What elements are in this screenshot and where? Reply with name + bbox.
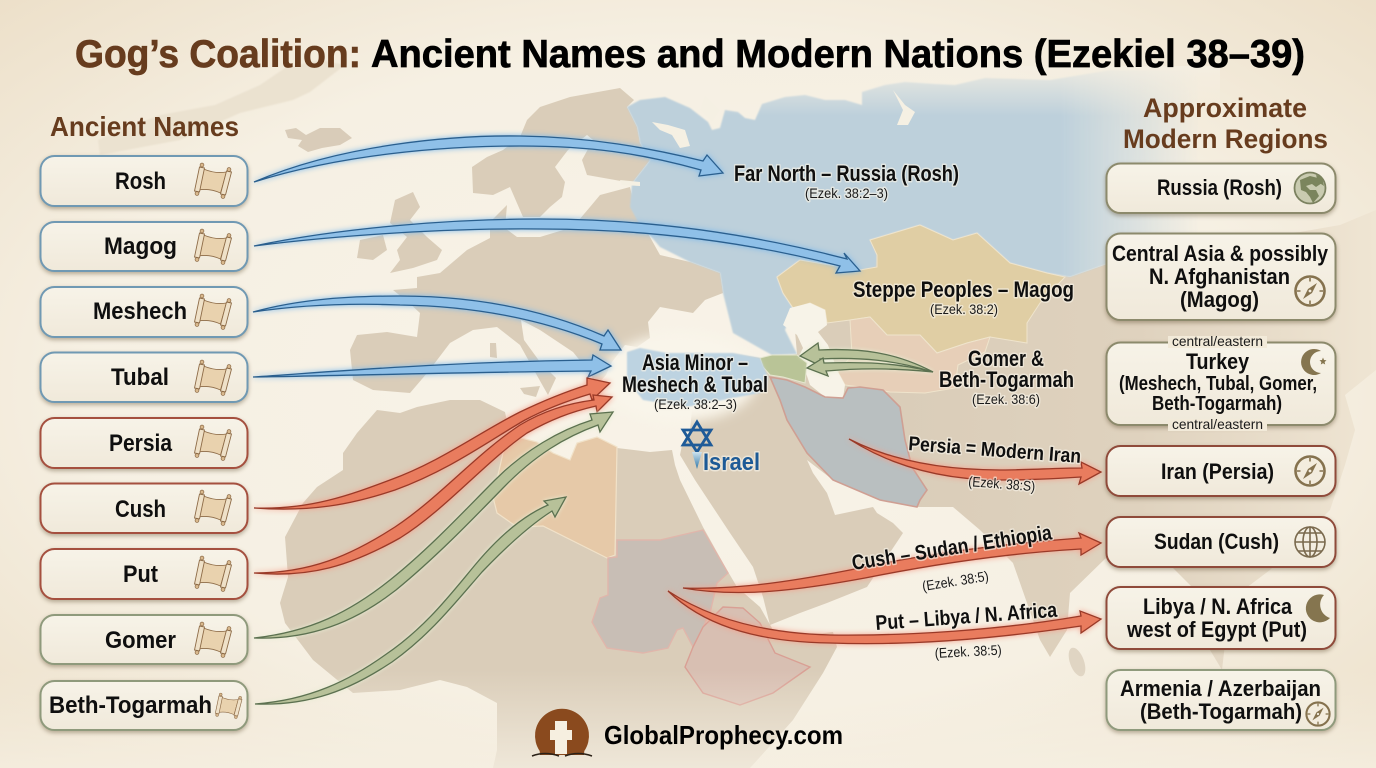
title (75, 33, 1305, 76)
card: Gomer: Gomer (105, 627, 176, 654)
card: Libya (1106, 587, 1336, 649)
region: Caucasus (760, 355, 807, 383)
card: Turkey: Beth-Togarmah) (1152, 393, 1282, 415)
map label: Persia: (Ezek. 38:S) (968, 473, 1036, 494)
map label: Persia (908, 433, 1082, 494)
card: Russia: Russia (Rosh) (1157, 175, 1282, 200)
card: Iran: Iran (Persia) (1161, 459, 1274, 484)
map label: Far North: (Ezek. 38:2–3) (805, 185, 888, 201)
logo mark (532, 709, 592, 756)
card: Persia: Persia (109, 430, 173, 457)
map label: Far North: Far North – Russia (Rosh) (734, 161, 959, 186)
card: Gomer (40, 615, 248, 664)
icon: crescent and star (1301, 349, 1326, 375)
title: black part: Ancient Names and Modern Nations (Ezekiel 38–39) (371, 33, 1305, 76)
border label bottom: central/eastern: central/eastern (1172, 416, 1263, 432)
arrow: Beth-Togarmah (255, 497, 566, 704)
arrow: Gomer label lower (807, 358, 933, 376)
logo text: GlobalProphecy.com (604, 720, 843, 750)
card: Central Asia: (Magog) (1180, 287, 1259, 312)
card: Magog: Magog (104, 233, 177, 260)
card: Russia (1106, 164, 1336, 213)
arrow: Tubal to Asia Minor (253, 355, 611, 377)
arrow: Magog to Steppe (254, 219, 860, 273)
card: Beth-Togarmah: Beth-Togarmah (49, 692, 212, 719)
region: Russia (627, 70, 1240, 355)
map label: Asia Minor: (Ezek. 38:2–3) (654, 396, 737, 412)
land: Sri Lanka (1065, 646, 1089, 678)
map label: Cush: Cush – Sudan / Ethiopia (850, 521, 1054, 575)
card: Sudan: Sudan (Cush) (1154, 529, 1279, 554)
arrow: Put to Asia Minor (254, 395, 612, 574)
card: Put (40, 549, 248, 599)
card: Cush: Cush (115, 496, 166, 523)
arrows: red (254, 378, 1101, 644)
map label: Gomer and Beth-Togarmah: Beth-Togarmah (939, 367, 1074, 392)
map label: Persia: Persia = Modern Iran (908, 433, 1082, 468)
card: Sudan (1106, 517, 1336, 567)
card: Put: Put (123, 561, 158, 588)
land: Britain (390, 192, 442, 273)
map label: Put: Put – Libya / N. Africa (875, 599, 1058, 635)
land: Asia (627, 210, 1376, 670)
card: Turkey: Turkey (1186, 349, 1250, 374)
heading: Approximate Modern Regions: Approximate (1143, 93, 1307, 123)
heading: Approximate Modern Regions: Modern Regions (1123, 124, 1328, 154)
arrow: Cush to Asia Minor (254, 378, 610, 509)
map label: Steppe Peoples (853, 277, 1074, 317)
map label: Gomer and Beth-Togarmah: Gomer & (968, 346, 1044, 371)
logo: GlobalProphecy.com (532, 709, 843, 756)
sea: northern gulfs (620, 90, 915, 186)
map label: Cush: (Ezek. 38:5) (921, 568, 990, 594)
border label top: central/eastern: central/eastern (1172, 333, 1263, 349)
icon: star of David (683, 422, 711, 452)
card: Libya: west of Egypt (Put) (1126, 617, 1307, 642)
arrow: Put to Libya card (668, 591, 1101, 644)
region: Libya (493, 435, 617, 558)
card: Armenia: (Beth-Togarmah) (1140, 699, 1302, 724)
card: Armenia (1106, 670, 1336, 730)
card: Armenia: Armenia / Azerbaijan (1120, 676, 1321, 701)
map label: Asia Minor (622, 350, 768, 412)
card: Turkey (1106, 333, 1336, 432)
land: Mediterranean islands (490, 343, 540, 397)
card: Magog (40, 222, 248, 271)
card: Rosh (40, 156, 248, 206)
land: Iceland (285, 128, 352, 152)
region: Ethiopia (685, 607, 810, 705)
map label: Steppe Peoples: Steppe Peoples – Magog (853, 277, 1074, 302)
land: Scandinavia (472, 88, 650, 217)
map label: Gomer and Beth-Togarmah (939, 346, 1074, 407)
card: Beth-Togarmah (40, 681, 248, 730)
card: Meshech (40, 287, 248, 337)
map label: Israel (683, 422, 760, 476)
map label: Gomer and Beth-Togarmah: (Ezek. 38:6) (972, 391, 1040, 407)
arrow: Rosh to Far North (254, 136, 723, 182)
arrow: Meshech to Asia Minor (253, 296, 621, 350)
map label: Asia Minor: Asia Minor – (642, 350, 748, 375)
icon: crescent (1306, 594, 1330, 622)
map label: Put (875, 599, 1058, 661)
label: Israel: Israel (703, 449, 760, 476)
card: Iran (1106, 446, 1336, 496)
map label: Put: (Ezek. 38:5) (934, 642, 1002, 661)
bottom fade (0, 670, 1376, 768)
glow around Asia Minor (602, 334, 758, 422)
sea: Caspian (783, 303, 845, 398)
arrow: Gomer to Asia Minor (254, 412, 613, 638)
title: brown part: Gog’s Coalition: (75, 33, 361, 76)
region: Central Asia south (838, 317, 990, 393)
arrow: Cush to Sudan card (683, 533, 1101, 593)
icon: location pin (692, 452, 702, 469)
card: Turkey: (Meshech, Tubal, Gomer, (1119, 373, 1317, 395)
region: Sudan (592, 530, 728, 653)
card: Libya: Libya / N. Africa (1143, 594, 1293, 619)
arrow: Gomer label upper (800, 343, 933, 372)
icon: grid globe (1295, 527, 1325, 557)
region: Asia Minor (627, 348, 768, 407)
map label: Far North (734, 161, 959, 201)
arrows: green (254, 343, 933, 704)
map label: Asia Minor: Meshech & Tubal (622, 372, 768, 397)
land: Ireland (357, 235, 387, 260)
card: Cush (40, 484, 248, 533)
card: Persia (40, 418, 248, 468)
card: Tubal (40, 352, 248, 402)
arrow: Persia to Iran (849, 439, 1101, 484)
card: Central Asia (1106, 234, 1336, 320)
arctic fade (720, 66, 1220, 116)
arrows: blue (253, 136, 860, 377)
heading: Approximate Modern Regions (1123, 93, 1328, 154)
region: Iran (770, 377, 927, 507)
land: Greenland (98, 60, 345, 155)
panel: ancient names (40, 111, 248, 730)
heading: Ancient Names: Ancient Names (50, 111, 239, 142)
panel: modern regions (1106, 93, 1336, 730)
region: Kazakhstan steppe (777, 225, 1065, 353)
land: Africa (280, 400, 837, 768)
land: Europe (350, 187, 723, 395)
map label: Steppe Peoples: (Ezek. 38:2) (930, 301, 998, 317)
card: Meshech: Meshech (93, 298, 187, 325)
card: Central Asia: N. Afghanistan (1149, 264, 1290, 289)
card: Central Asia: Central Asia & possibly (1112, 241, 1329, 266)
card: Rosh: Rosh (115, 168, 166, 195)
card: Tubal: Tubal (111, 364, 169, 391)
icon: earth globe (1294, 172, 1326, 204)
map label: Cush (850, 521, 1054, 594)
